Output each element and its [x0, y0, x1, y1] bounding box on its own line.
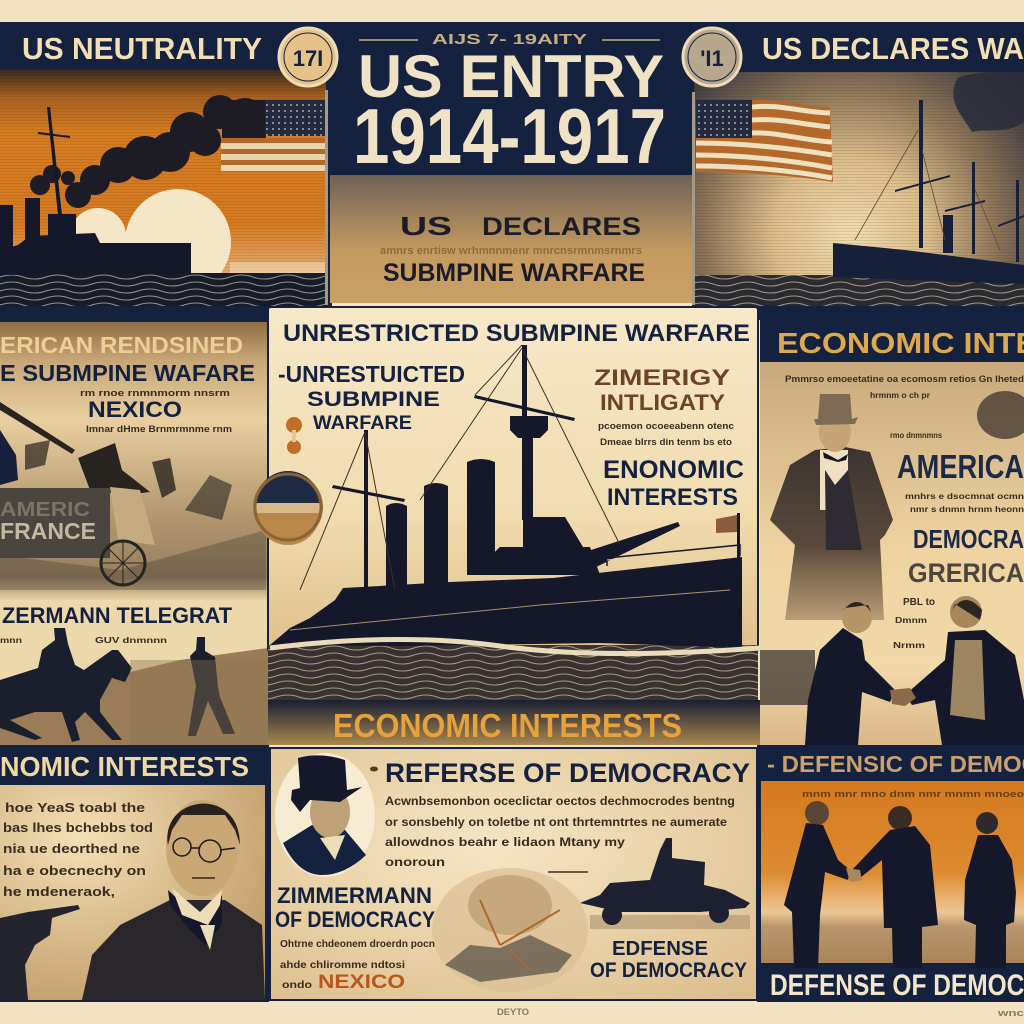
ship: warship silhouette	[833, 100, 1024, 284]
text: small print: hrmnm o ch pr	[870, 391, 930, 400]
text: body copy: or sonsbehly on toletbe nt ont thrtemntrtes ne aumerate	[385, 815, 727, 829]
panel: US declares war	[683, 22, 1024, 320]
label: Nexico: NEXICO	[88, 397, 182, 422]
badge: left seal: 17I	[293, 46, 323, 71]
illustration: armoured car	[580, 838, 750, 929]
figure: man in top hat	[770, 394, 893, 620]
heading: Zimmermann telegram: ZERMANN TELEGRAT	[2, 603, 233, 628]
text: Zimmermann intelligence: Dmeae blrrs din tenm bs eto	[600, 437, 733, 447]
text: small print: GUV dnmnnn	[95, 636, 167, 645]
icon: setting sun	[70, 189, 326, 295]
panel: defense of democracy right	[757, 745, 1024, 1002]
figure: handshake	[805, 596, 1024, 745]
text: US declares: US	[400, 211, 452, 241]
footer mark: wnc	[997, 1008, 1024, 1018]
icon: portrait in top hat	[275, 753, 375, 877]
ship: steamer silhouette	[0, 107, 191, 275]
text: body copy: hoe YeaS toabl the	[5, 800, 145, 815]
text: defense of democracy: OF DEMOCRACY	[590, 959, 747, 982]
illustration: battle scene	[0, 402, 266, 590]
subtitle: AIJS 7- 19AITY	[432, 31, 587, 48]
icon: bullet dot	[370, 766, 378, 772]
figure: three silhouettes	[784, 801, 1016, 968]
panel: defense of democracy centre	[270, 748, 757, 1000]
heading: US neutrality: US NEUTRALITY	[22, 31, 262, 66]
text: Zimmermann intelligence	[594, 365, 734, 447]
text: economic interests: ENONOMIC	[603, 456, 744, 484]
text: small print: mnhrs e dsocmnat ocmn	[905, 492, 1024, 501]
panel: central unrestricted submarine warfare	[253, 307, 758, 652]
text: submarine warfare: SUBMPINE WARFARE	[383, 259, 645, 287]
divider lines	[359, 39, 660, 41]
text: small print	[80, 388, 232, 434]
panel: US neutrality	[0, 22, 332, 322]
footer mark: DEYTO	[497, 1007, 529, 1017]
label: France wagon: AMERIC	[0, 499, 90, 521]
text: unrestricted bullet: -UNRESTUICTED	[278, 361, 465, 387]
text: small print: rmo dnmnmns	[890, 431, 943, 440]
text: body copy: Acwnbsemonbon oceclictar oectos dechmocrodes bentng	[385, 794, 735, 808]
panel: economic interests left bottom	[0, 745, 269, 1002]
heading: submarine warfare: E SUBMPINE WAFARE	[0, 360, 255, 386]
icon: wheel	[101, 541, 145, 585]
panel: Mexico and France	[0, 322, 267, 600]
label: France wagon: FRANCE	[0, 518, 96, 544]
text: small print: Pmmrso emoeetatine oa ecomosm retios Gn lheted	[785, 374, 1024, 384]
heading: economic interests: ECONOMIC INTE	[777, 328, 1024, 360]
text: body copy	[3, 800, 153, 899]
text: small print: PBL to	[903, 597, 935, 608]
icon: walking man	[188, 637, 235, 736]
text: Zimmermann intelligence: ZIMERIGY	[594, 365, 730, 390]
text: small print	[0, 636, 167, 645]
text: small print: Ohtrne chdeonem droerdn pocn	[280, 939, 435, 950]
flag: neutrality	[221, 90, 328, 305]
figure: president portrait	[82, 800, 265, 1000]
text: small print: Imnar dHme Brnmrmnme rnm	[86, 424, 232, 434]
label: France wagon	[0, 488, 110, 558]
panel: US declares submarine warfare	[330, 175, 692, 303]
text: small print: ahde chliromme ndtosi	[280, 960, 405, 971]
icon: orange marker	[286, 417, 302, 454]
panel: title	[328, 22, 694, 180]
text: Zimmermann intelligence: pcoemon ocoeeabenn otenc	[598, 421, 734, 431]
heading: economic interests centre: ECONOMIC INTERESTS	[333, 707, 682, 744]
text: defense of democracy: EDFENSE	[612, 938, 708, 960]
text: body copy: allowdnos beahr e lidaon Mtany my	[385, 835, 625, 849]
text: unrestricted bullet: WARFARE	[313, 413, 412, 434]
text: economic interests: INTERESTS	[607, 484, 738, 511]
text: body copy: onoroun	[385, 855, 445, 869]
icon: medallion	[253, 471, 323, 545]
text: defense of democracy	[590, 938, 747, 982]
text: small print	[785, 374, 1024, 650]
badge: right seal: 'I1	[700, 46, 724, 71]
illustration: sea at right	[760, 650, 815, 705]
heading: unrestricted submarine warfare: UNRESTRICTED SUBMPINE WARFARE	[283, 320, 750, 347]
flag: ship ensign	[716, 515, 737, 533]
text: US declares	[400, 211, 641, 241]
panel: Zimmermann telegram	[0, 600, 268, 745]
text: small print: Dmnm	[895, 616, 927, 625]
text: body copy	[385, 794, 735, 869]
panel: economic interests right	[760, 320, 1024, 745]
text: small print: mnm mnr mno dnm nmr mnmn mnoeo	[802, 789, 1024, 799]
text: US declares: DECLARES	[482, 213, 641, 241]
text: small print band: amnrs enrtisw wrhmnnmenr mnrcnsrmnmsrnmrs	[380, 245, 642, 257]
illustration: sea around central ship	[130, 645, 760, 745]
text: unrestricted bullet: SUBMPINE	[307, 388, 440, 411]
text: unrestricted bullet	[278, 361, 465, 434]
heading: nomic interests: NOMIC INTERESTS	[0, 751, 249, 782]
text: body copy: nia ue deorthed ne	[3, 841, 140, 856]
text: Zimmermann intelligence: INTLIGATY	[600, 390, 725, 415]
footer mark	[497, 1007, 1024, 1018]
icon: horse and rider	[0, 628, 132, 742]
text: body copy: he mdeneraok,	[3, 884, 115, 899]
ship: central warship	[270, 345, 760, 654]
badge: left seal	[279, 28, 337, 86]
text: small print: mnn	[0, 636, 22, 645]
heading: defense of democracy: REFERSE OF DEMOCRACY	[385, 758, 750, 788]
icon: pointing hand	[0, 905, 80, 1000]
text: America and democracy	[897, 448, 1024, 588]
text: economic interests	[603, 456, 744, 511]
title	[353, 43, 666, 180]
text: small print: ondo	[282, 980, 312, 991]
text: body copy: bas lhes bchebbs tod	[3, 820, 153, 835]
title: 1914-1917	[353, 92, 666, 180]
title: US ENTRY	[358, 43, 664, 110]
badge: right seal	[683, 28, 741, 86]
text: body copy: ha e obecnechy on	[3, 863, 146, 878]
heading: defense: - DEFENSIC OF DEMOC	[767, 751, 1024, 777]
text: small print: rm rnoe rnmnmorm nnsrm	[80, 388, 230, 398]
flag: declares war	[692, 92, 833, 305]
label: Nexico: NEXICO	[318, 972, 405, 993]
text: Zimmermann: ZIMMERMANN	[277, 883, 432, 908]
icon: dark clouds	[953, 72, 1024, 132]
text: small print	[280, 939, 435, 991]
heading: American renounced: ERICAN RENDSINED	[0, 332, 243, 358]
illustration: explosion sketch	[432, 868, 588, 992]
icon: dark scribble	[977, 391, 1024, 439]
icon: smoke plume	[30, 95, 266, 208]
text: small print: nmr s dnmn hrnm heonn	[910, 505, 1024, 514]
text: of democracy: OF DEMOCRACY	[275, 907, 435, 932]
text: small print: Nrmm	[893, 641, 925, 650]
